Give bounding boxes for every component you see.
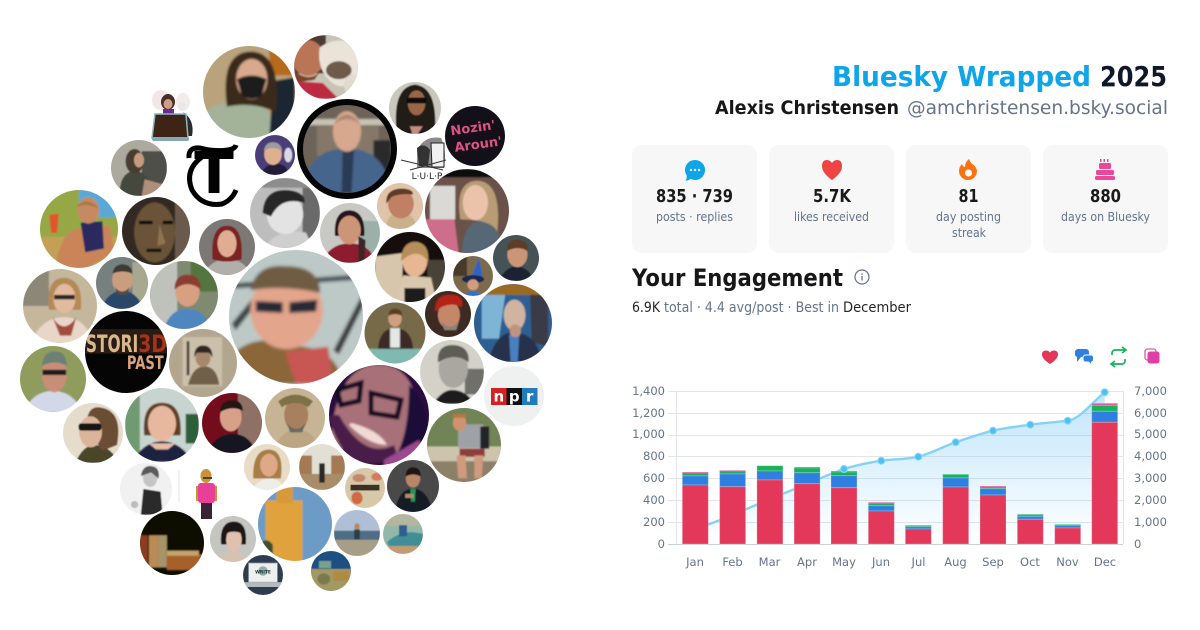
month labels: Jan bbox=[685, 555, 704, 569]
month labels: Sep bbox=[982, 555, 1004, 569]
month labels: Mar bbox=[759, 555, 781, 569]
avatar: woman with braid bbox=[320, 203, 380, 263]
cumulative line bbox=[695, 392, 1105, 530]
icon: quotes squares bbox=[1145, 349, 1160, 364]
combined bar and line chart bbox=[632, 384, 1167, 569]
right axis labels: 7,000 bbox=[1134, 384, 1167, 398]
avatar: man in blazer bbox=[493, 235, 539, 281]
panel: days on Bluesky: days on Bluesky bbox=[1061, 209, 1151, 224]
avatar: laptop logo: WRITE bbox=[255, 569, 271, 575]
engagement summary: 6.9K bbox=[632, 300, 661, 316]
panel: days on Bluesky: 880 bbox=[1090, 186, 1121, 207]
avatar: Storied Past logo: PAST bbox=[127, 352, 164, 374]
left axis labels: 1,400 bbox=[632, 384, 665, 398]
right axis labels: 3,000 bbox=[1134, 471, 1167, 485]
right axis labels: 5,000 bbox=[1134, 427, 1167, 441]
avatar: sepia man bbox=[377, 183, 423, 229]
panel: posts and replies bbox=[632, 145, 757, 253]
avatar: blonde woman bbox=[425, 169, 509, 253]
avatar: mosaic man bbox=[265, 388, 325, 448]
panel: likes received bbox=[769, 145, 894, 253]
avatar: woman in blue shirt bbox=[150, 261, 218, 329]
avatar: woman on beach art bbox=[379, 510, 427, 558]
grid lines bbox=[668, 391, 1124, 544]
left axis labels: 1,200 bbox=[632, 406, 665, 420]
avatar: NPR logo: n bbox=[493, 388, 504, 406]
avatar: woman in office bbox=[125, 388, 199, 462]
user name and handle bbox=[715, 97, 1168, 119]
engagement summary: December bbox=[843, 300, 911, 316]
avatar: Nozin Aroun logo: Nozin' bbox=[450, 118, 496, 139]
month labels: Oct bbox=[1020, 555, 1040, 569]
avatar: man in red beanie bbox=[425, 291, 471, 337]
panel: day posting streak: day posting bbox=[936, 209, 1001, 224]
avatar: framed portrait bbox=[169, 329, 237, 397]
panel: likes received: likes received bbox=[794, 209, 869, 224]
avatar: big selfie in cap bbox=[229, 250, 363, 384]
right axis labels: 0 bbox=[1134, 537, 1141, 551]
avatar: old books bbox=[140, 511, 204, 575]
panel: day posting streak: 81 bbox=[958, 186, 978, 207]
title: 2025 bbox=[1100, 60, 1167, 93]
icon: heart bbox=[822, 160, 842, 180]
left axis labels: 200 bbox=[643, 515, 665, 529]
right axis labels: 2,000 bbox=[1134, 493, 1167, 507]
avatar: T logo: T bbox=[194, 139, 234, 207]
icon: chat bubble bbox=[685, 160, 705, 181]
month labels: Feb bbox=[722, 555, 743, 569]
panel: likes received: 5.7K bbox=[813, 186, 852, 207]
user name and handle: @amchristensen.bsky.social bbox=[907, 97, 1168, 119]
left axis labels: 0 bbox=[658, 537, 665, 551]
avatar: Nozin Aroun logo bbox=[445, 106, 505, 166]
month labels: Dec bbox=[1094, 555, 1116, 569]
icon: likes heart bbox=[1042, 350, 1058, 364]
avatar: bearded man bbox=[111, 140, 167, 196]
engagement summary: total · 4.4 avg/post · Best in bbox=[664, 300, 839, 316]
panel: days on Bluesky bbox=[1043, 145, 1168, 253]
avatar: woman with black bob bbox=[210, 516, 256, 562]
panel: posts and replies: 835 · 739 bbox=[656, 186, 733, 207]
chart legend icons bbox=[1042, 347, 1160, 367]
avatar: man thinking in library bbox=[474, 284, 552, 362]
avatar: LULP logo: L·U·L·P bbox=[412, 172, 443, 182]
left axis labels bbox=[632, 384, 665, 551]
icon: flame bbox=[959, 159, 977, 180]
right axis labels bbox=[1134, 384, 1167, 551]
avatar: black and white man bbox=[420, 340, 484, 404]
avatar: wizard kid bbox=[453, 256, 493, 296]
engagement summary bbox=[632, 300, 911, 316]
avatar: man in suit with green tie bbox=[382, 455, 444, 517]
avatar: ruins with man bbox=[294, 439, 350, 495]
avatar: blonde woman small bbox=[244, 444, 290, 490]
stacked bars bbox=[682, 403, 1118, 544]
month labels: Nov bbox=[1056, 555, 1079, 569]
left axis labels: 600 bbox=[643, 471, 665, 485]
avatar: woman with glasses and curls bbox=[389, 82, 441, 134]
month labels: Jun bbox=[871, 555, 890, 569]
avatar: Storied Past logo: 3D bbox=[138, 330, 167, 358]
avatar: woman in black background bbox=[375, 232, 445, 302]
avatar: cartoon man in pink shirt bbox=[178, 469, 217, 519]
avatar: NPR logo: p bbox=[509, 388, 520, 406]
panel: posts and replies: posts · replies bbox=[656, 209, 733, 224]
avatar: sunny woman bbox=[40, 190, 118, 268]
title: Bluesky Wrapped bbox=[832, 60, 1091, 93]
left axis labels: 800 bbox=[643, 449, 665, 463]
avatar: smiling man, purple tint bbox=[329, 365, 429, 465]
right axis labels: 1,000 bbox=[1134, 515, 1167, 529]
avatar: woman in sunglasses bbox=[63, 403, 123, 463]
month labels: Jul bbox=[911, 555, 925, 569]
avatar: man leaning on map table bbox=[364, 302, 426, 364]
avatar: woman on hilltop bbox=[329, 505, 385, 561]
avatar: desert and blue sky bbox=[307, 547, 355, 595]
cumulative area bbox=[695, 392, 1105, 544]
left axis labels: 400 bbox=[643, 493, 665, 507]
left axis labels: 1,000 bbox=[632, 427, 665, 441]
month labels: Aug bbox=[944, 555, 967, 569]
panel: day posting streak bbox=[906, 145, 1031, 253]
user name and handle: Alexis Christensen bbox=[715, 97, 899, 119]
avatar: cartoon man bbox=[255, 135, 295, 175]
icon: replies bubbles bbox=[1075, 349, 1094, 365]
avatar: NPR logo: r bbox=[526, 388, 534, 406]
avatar: coffee pot bitmoji bbox=[152, 90, 193, 141]
avatar cluster bbox=[13, 29, 560, 599]
right axis labels: 4,000 bbox=[1134, 449, 1167, 463]
avatar: laptop logo bbox=[243, 555, 283, 595]
heading: your engagement: Your Engagement bbox=[631, 264, 843, 292]
avatar: UT tower bbox=[258, 487, 332, 561]
avatar: smiling man with glasses bbox=[20, 346, 86, 412]
avatar: LULP logo bbox=[401, 138, 446, 182]
panel: day posting streak: streak bbox=[952, 225, 987, 240]
right axis labels: 6,000 bbox=[1134, 406, 1167, 420]
month labels bbox=[685, 555, 1116, 569]
avatar: red haired woman bbox=[199, 219, 255, 275]
line markers bbox=[840, 389, 1108, 472]
avatar: masked woman bbox=[203, 46, 295, 138]
avatar: man in blue hood bbox=[96, 257, 148, 309]
avatar: Storied Past logo: STORI bbox=[86, 330, 138, 358]
avatar: man on red background bbox=[202, 393, 262, 453]
avatar: bronze statue bbox=[122, 197, 190, 265]
month labels: Apr bbox=[797, 555, 817, 569]
avatar: Storied Past logo bbox=[85, 311, 167, 393]
avatar: man with black ring bbox=[297, 99, 397, 199]
avatar: Nozin Aroun logo: Aroun' bbox=[454, 134, 503, 156]
icon: cake bbox=[1095, 159, 1115, 180]
avatar: hiker sitting on rock bbox=[427, 408, 501, 482]
avatar: NPR logo bbox=[484, 366, 544, 426]
avatar: woman with glasses, left bbox=[23, 269, 97, 343]
icon: info bbox=[855, 270, 869, 284]
avatar: black and white portrait woman bbox=[120, 463, 172, 515]
avatar: man with cat bbox=[294, 35, 358, 99]
avatar: black and white woman bbox=[250, 178, 320, 248]
avatar: mouth badge bbox=[341, 464, 389, 512]
icon: reposts arrows bbox=[1111, 347, 1126, 367]
month labels: May bbox=[832, 555, 856, 569]
